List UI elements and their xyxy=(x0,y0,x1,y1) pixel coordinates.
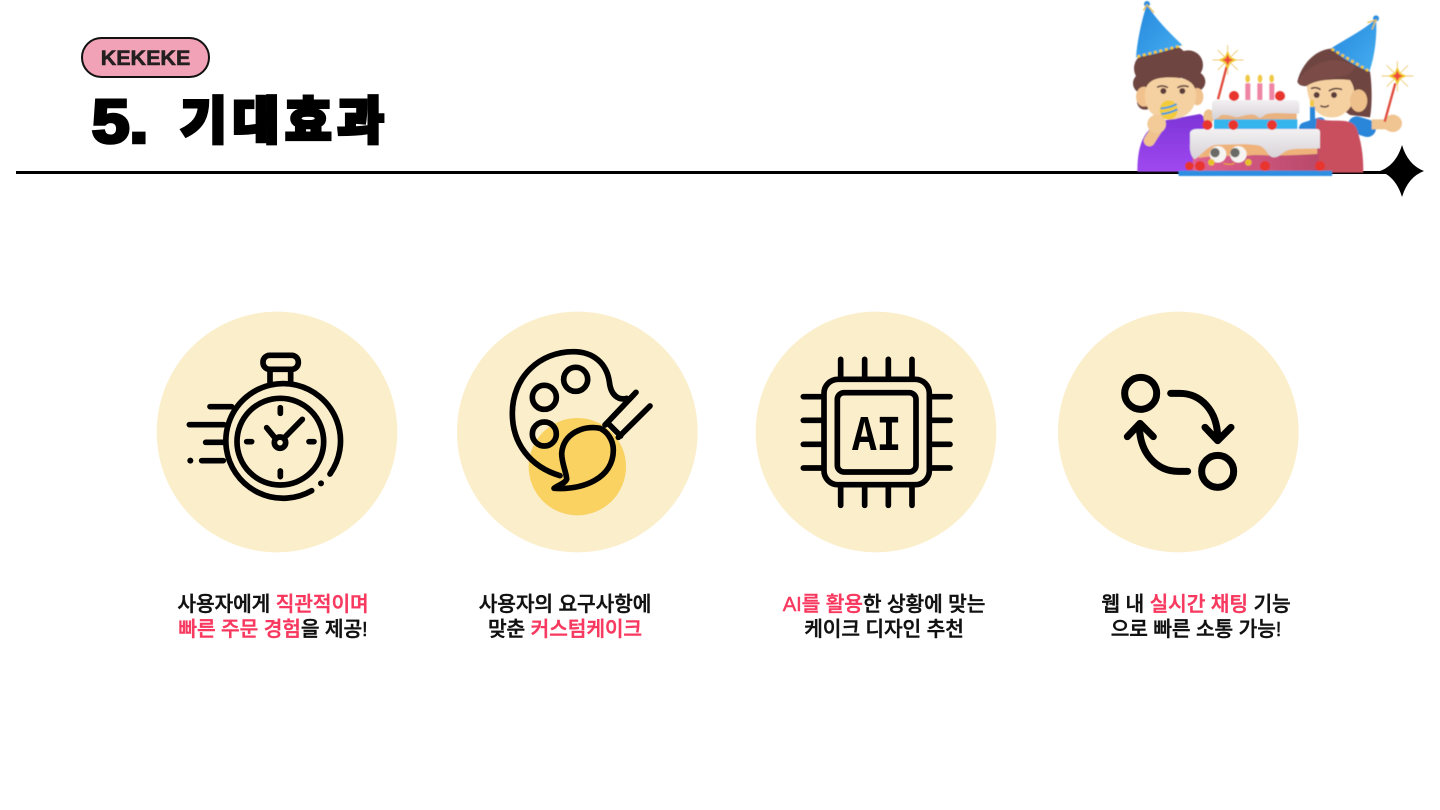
caption xyxy=(782,593,985,641)
icon: AI chip xyxy=(756,312,996,552)
caption xyxy=(1101,594,1291,641)
caption: 사용자에게 직관적이며 xyxy=(177,594,369,616)
caption: 웹 내 실시간 채팅 기능 xyxy=(1101,594,1291,616)
badge: KEKEKE xyxy=(81,37,210,78)
icon: exchange arrows xyxy=(1058,312,1299,552)
badge: KEKEKE: KEKEKE xyxy=(101,46,190,70)
icon: right sparkler xyxy=(1382,61,1413,122)
caption xyxy=(177,594,369,641)
panel: AI recommendation xyxy=(756,312,996,641)
caption: 맞춘 커스텀케이크 xyxy=(488,619,642,641)
panel: custom cake xyxy=(457,312,698,641)
panel: fast ordering xyxy=(156,312,398,641)
character: left child xyxy=(1133,1,1214,172)
title xyxy=(92,87,390,156)
icon: palette and brush xyxy=(457,312,698,552)
icon: four-point star xyxy=(1380,145,1424,197)
panel: realtime chat xyxy=(1058,312,1299,641)
icon: left sparkler xyxy=(1213,45,1243,99)
header divider line xyxy=(16,171,1406,174)
caption xyxy=(479,594,651,641)
icon: AI chip: AI xyxy=(852,409,901,466)
caption: 케이크 디자인 추천 xyxy=(804,619,964,641)
illustration: children with birthday cake xyxy=(1132,0,1414,177)
birthday cake xyxy=(1178,75,1332,176)
caption: 빠른 주문 경험을 제공! xyxy=(178,619,368,641)
title: 기대효과 xyxy=(180,93,390,150)
title: 5. xyxy=(92,87,148,156)
character: right child xyxy=(1297,15,1402,173)
icon: stopwatch xyxy=(156,312,398,552)
caption: 사용자의 요구사항에 xyxy=(479,594,651,616)
caption: AI를 활용한 상황에 맞는 xyxy=(783,594,985,616)
caption: 으로 빠른 소통 가능! xyxy=(1111,619,1281,641)
